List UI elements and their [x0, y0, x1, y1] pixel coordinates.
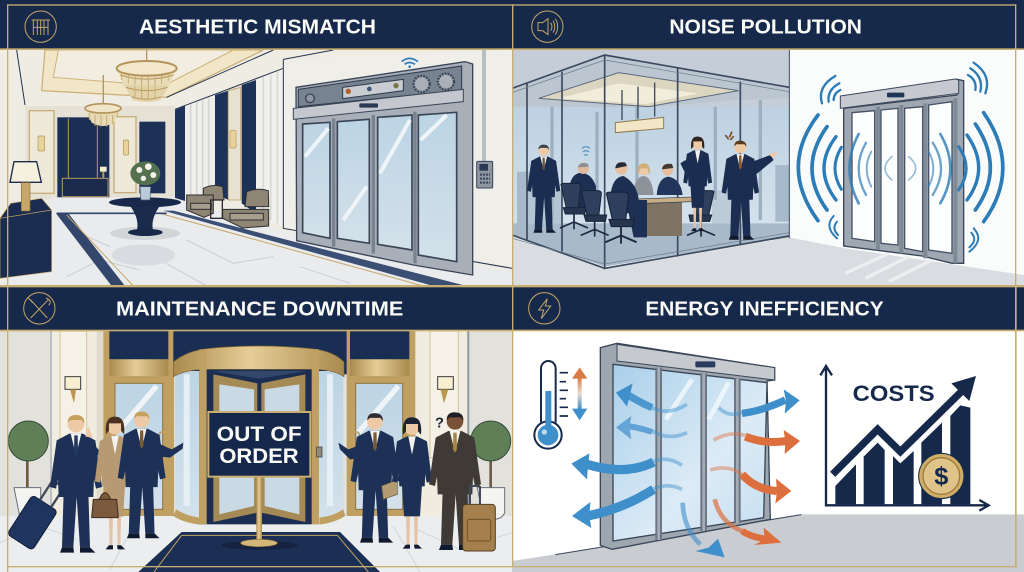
- panel: aesthetic mismatch: [0, 0, 512, 286]
- costs label: COSTS: [853, 381, 935, 406]
- woman standing: [680, 137, 712, 231]
- sign stand: [241, 476, 277, 547]
- out of order sign: OUT OF: [217, 422, 302, 446]
- navy cabinet: [0, 198, 52, 278]
- front seated man and chair: [605, 162, 647, 244]
- trend arrow: [833, 391, 962, 474]
- gesturing man: [722, 132, 778, 240]
- wall sconces: [65, 377, 453, 403]
- ceiling: [16, 50, 283, 110]
- header band: [0, 0, 512, 286]
- luggage: tan: [463, 486, 495, 551]
- seated people: [569, 163, 683, 210]
- luggage: navy: [7, 475, 70, 550]
- guests right: ?: [435, 416, 444, 432]
- side doors: [103, 331, 415, 516]
- cream pilasters: [50, 331, 470, 518]
- panel: maintenance downtime: [0, 286, 512, 572]
- grey floor: [512, 514, 1024, 572]
- topiary right: [471, 421, 511, 520]
- out of order sign: ORDER: [219, 444, 299, 468]
- sliding door: [600, 343, 775, 549]
- icon: tools in circle: [24, 293, 55, 324]
- header band: [512, 0, 1024, 286]
- glass meeting room: [512, 50, 789, 269]
- icon: table lamp: [10, 162, 41, 211]
- icon: coin: [919, 453, 964, 499]
- heading: NOISE POLLUTION: [669, 16, 862, 38]
- axes: [820, 366, 989, 511]
- round table with flowers: [109, 161, 181, 240]
- sound waves: [798, 63, 1003, 252]
- guests left: [7, 412, 183, 553]
- icon: sliding door with exposed mechanism: [293, 58, 473, 275]
- meeting table: [638, 196, 692, 236]
- armchairs: [187, 185, 269, 228]
- arrows: blue air leaving left: [571, 383, 687, 528]
- navy rug: [138, 532, 380, 572]
- panel: noise pollution: [512, 0, 1024, 286]
- bars: [835, 405, 970, 504]
- icon: lightning bolt in circle: [529, 293, 560, 324]
- floor: [512, 233, 1024, 286]
- icon: thermometer: [534, 361, 587, 449]
- right wall: [283, 50, 512, 268]
- out of order sign: [208, 412, 310, 477]
- chairs: [560, 183, 715, 237]
- arrows: air leaving right and down: [683, 389, 800, 557]
- icon: door in circle: [25, 11, 56, 42]
- icon: door panel right: [840, 79, 964, 263]
- marble floor: [0, 197, 512, 286]
- revolving door: [159, 331, 359, 525]
- header band: [0, 286, 512, 572]
- header band: [512, 286, 1024, 567]
- guests right: [338, 412, 495, 551]
- pendant light: [615, 83, 664, 133]
- icon: chandelier large: [117, 50, 177, 102]
- back wall with navy niches: [25, 106, 175, 199]
- icon: coin: $: [934, 463, 948, 491]
- heading: ENERGY INEFFICIENCY: [645, 298, 884, 320]
- heading: MAINTENANCE DOWNTIME: [116, 298, 403, 320]
- handbag: [92, 493, 118, 518]
- heading: AESTHETIC MISMATCH: [139, 16, 376, 38]
- chart: rising costs: [820, 366, 989, 511]
- icon: wifi over head: [582, 147, 590, 155]
- topiary left: [8, 421, 48, 518]
- panel: energy inefficiency: [512, 286, 1024, 572]
- marble floor: [0, 516, 512, 572]
- icon: chandelier small: [85, 75, 121, 127]
- standing man arms crossed: [527, 145, 560, 233]
- icon: speaker in circle: [532, 11, 563, 42]
- curtains: [175, 69, 283, 227]
- icon: keypad: [477, 161, 493, 188]
